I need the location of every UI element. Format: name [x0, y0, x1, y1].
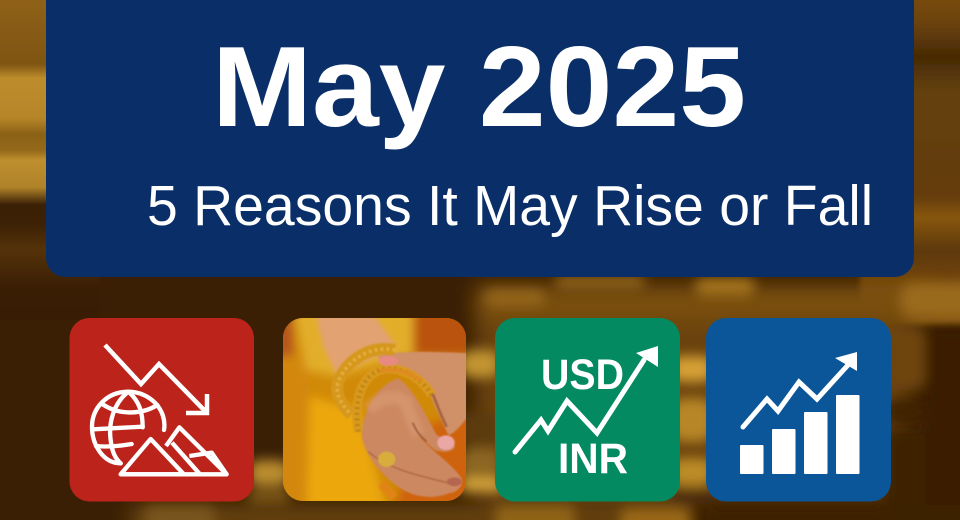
- icon: mountains: [121, 427, 227, 474]
- icon: rising line with arrow: [515, 346, 658, 452]
- icon: globe: [92, 392, 164, 463]
- nails and ring: [378, 356, 398, 366]
- card: gold bangles photo: [283, 318, 466, 501]
- title: May 2025: May 2025: [212, 24, 746, 151]
- icon: rising line with arrow: [743, 352, 857, 427]
- panel: title banner: [46, 0, 914, 277]
- card: global decline icon: [70, 318, 254, 502]
- card: USD INR icon: [495, 318, 680, 502]
- other hand: [377, 352, 470, 435]
- subtitle: 5 Reasons It May Rise or Fall: [147, 174, 873, 238]
- card: bar chart icon: [706, 318, 891, 502]
- front hand: [362, 378, 462, 497]
- icon: falling arrow: [105, 345, 207, 413]
- bar chart: [740, 395, 860, 474]
- bangles: [337, 349, 395, 415]
- label: USD: USD: [541, 351, 624, 399]
- label: INR: INR: [558, 435, 628, 483]
